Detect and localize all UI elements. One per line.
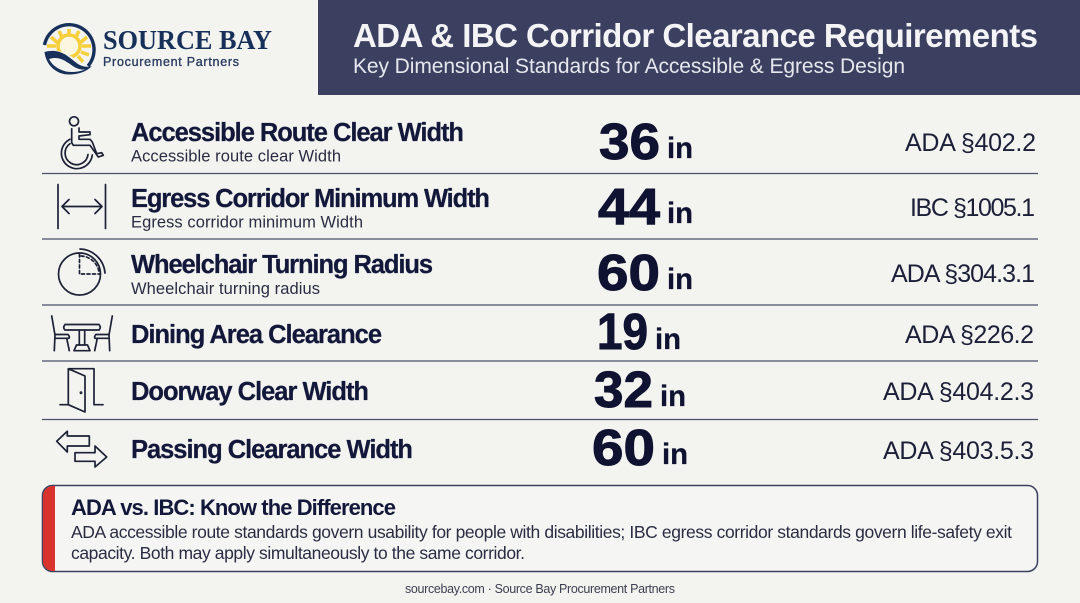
heading: Passing Clearance Width	[131, 436, 413, 464]
header banner	[318, 0, 1080, 95]
row: doorway	[60, 361, 1034, 418]
footer: sourcebay.com · Source Bay Procurement Partners	[405, 582, 675, 596]
code reference: ADA §226.2	[905, 321, 1034, 349]
icon: table and chairs	[52, 316, 112, 351]
value: 19	[597, 303, 648, 360]
value: 32	[594, 361, 653, 418]
value: 36	[599, 113, 660, 170]
callout: ADA vs. IBC	[42, 486, 1038, 572]
code reference: ADA §402.2	[905, 129, 1036, 157]
code reference: ADA §304.3.1	[891, 260, 1035, 288]
heading: Accessible Route Clear Width	[131, 119, 464, 147]
row: passing clearance	[57, 419, 1034, 476]
row: egress corridor: in	[667, 197, 693, 230]
row: doorway: in	[660, 380, 686, 413]
callout body: capacity. Both may apply simultaneously to the same corridor.	[71, 543, 525, 563]
value: 60	[592, 419, 655, 476]
row: dining area	[52, 303, 1034, 360]
heading: Wheelchair Turning Radius	[131, 251, 433, 279]
brand name: SOURCE BAY	[103, 24, 272, 55]
code reference: ADA §404.2.3	[883, 378, 1034, 406]
heading: Doorway Clear Width	[131, 378, 369, 406]
logo	[44, 24, 272, 74]
subtitle: Key Dimensional Standards for Accessible & Egress Design	[353, 55, 905, 78]
callout heading: ADA vs. IBC: Know the Difference	[71, 495, 396, 520]
icon: opposing arrows	[57, 431, 107, 467]
value: 60	[597, 244, 660, 301]
heading: Egress Corridor Minimum Width	[131, 185, 490, 213]
icon: turning radius dial	[58, 249, 105, 295]
heading: Dining Area Clearance	[131, 321, 382, 349]
row: turning radius: in	[667, 263, 693, 296]
row: egress corridor	[58, 178, 1035, 235]
icon: open door	[60, 369, 103, 412]
title: ADA & IBC Corridor Clearance Requirements	[353, 17, 1038, 54]
row: dining area: in	[655, 323, 681, 356]
icon: width arrow	[58, 184, 106, 228]
code reference: ADA §403.5.3	[883, 437, 1034, 465]
row: passing clearance: in	[662, 438, 688, 471]
description: Wheelchair turning radius	[131, 280, 320, 298]
icon: sun over waves logo	[44, 25, 94, 74]
value: 44	[598, 178, 661, 235]
row: accessible route	[61, 113, 1036, 170]
callout body	[71, 522, 1012, 563]
row: accessible route: in	[667, 132, 693, 165]
description: Egress corridor minimum Width	[131, 214, 363, 232]
brand tagline: Procurement Partners	[103, 55, 239, 69]
row: turning radius	[58, 244, 1035, 301]
description: Accessible route clear Width	[131, 148, 341, 166]
icon: wheelchair	[61, 117, 103, 169]
callout body: ADA accessible route standards govern usability for people with disabilities; IBC egress corridor standards govern life-safety exit	[71, 522, 1012, 542]
code reference: IBC §1005.1	[910, 194, 1035, 222]
